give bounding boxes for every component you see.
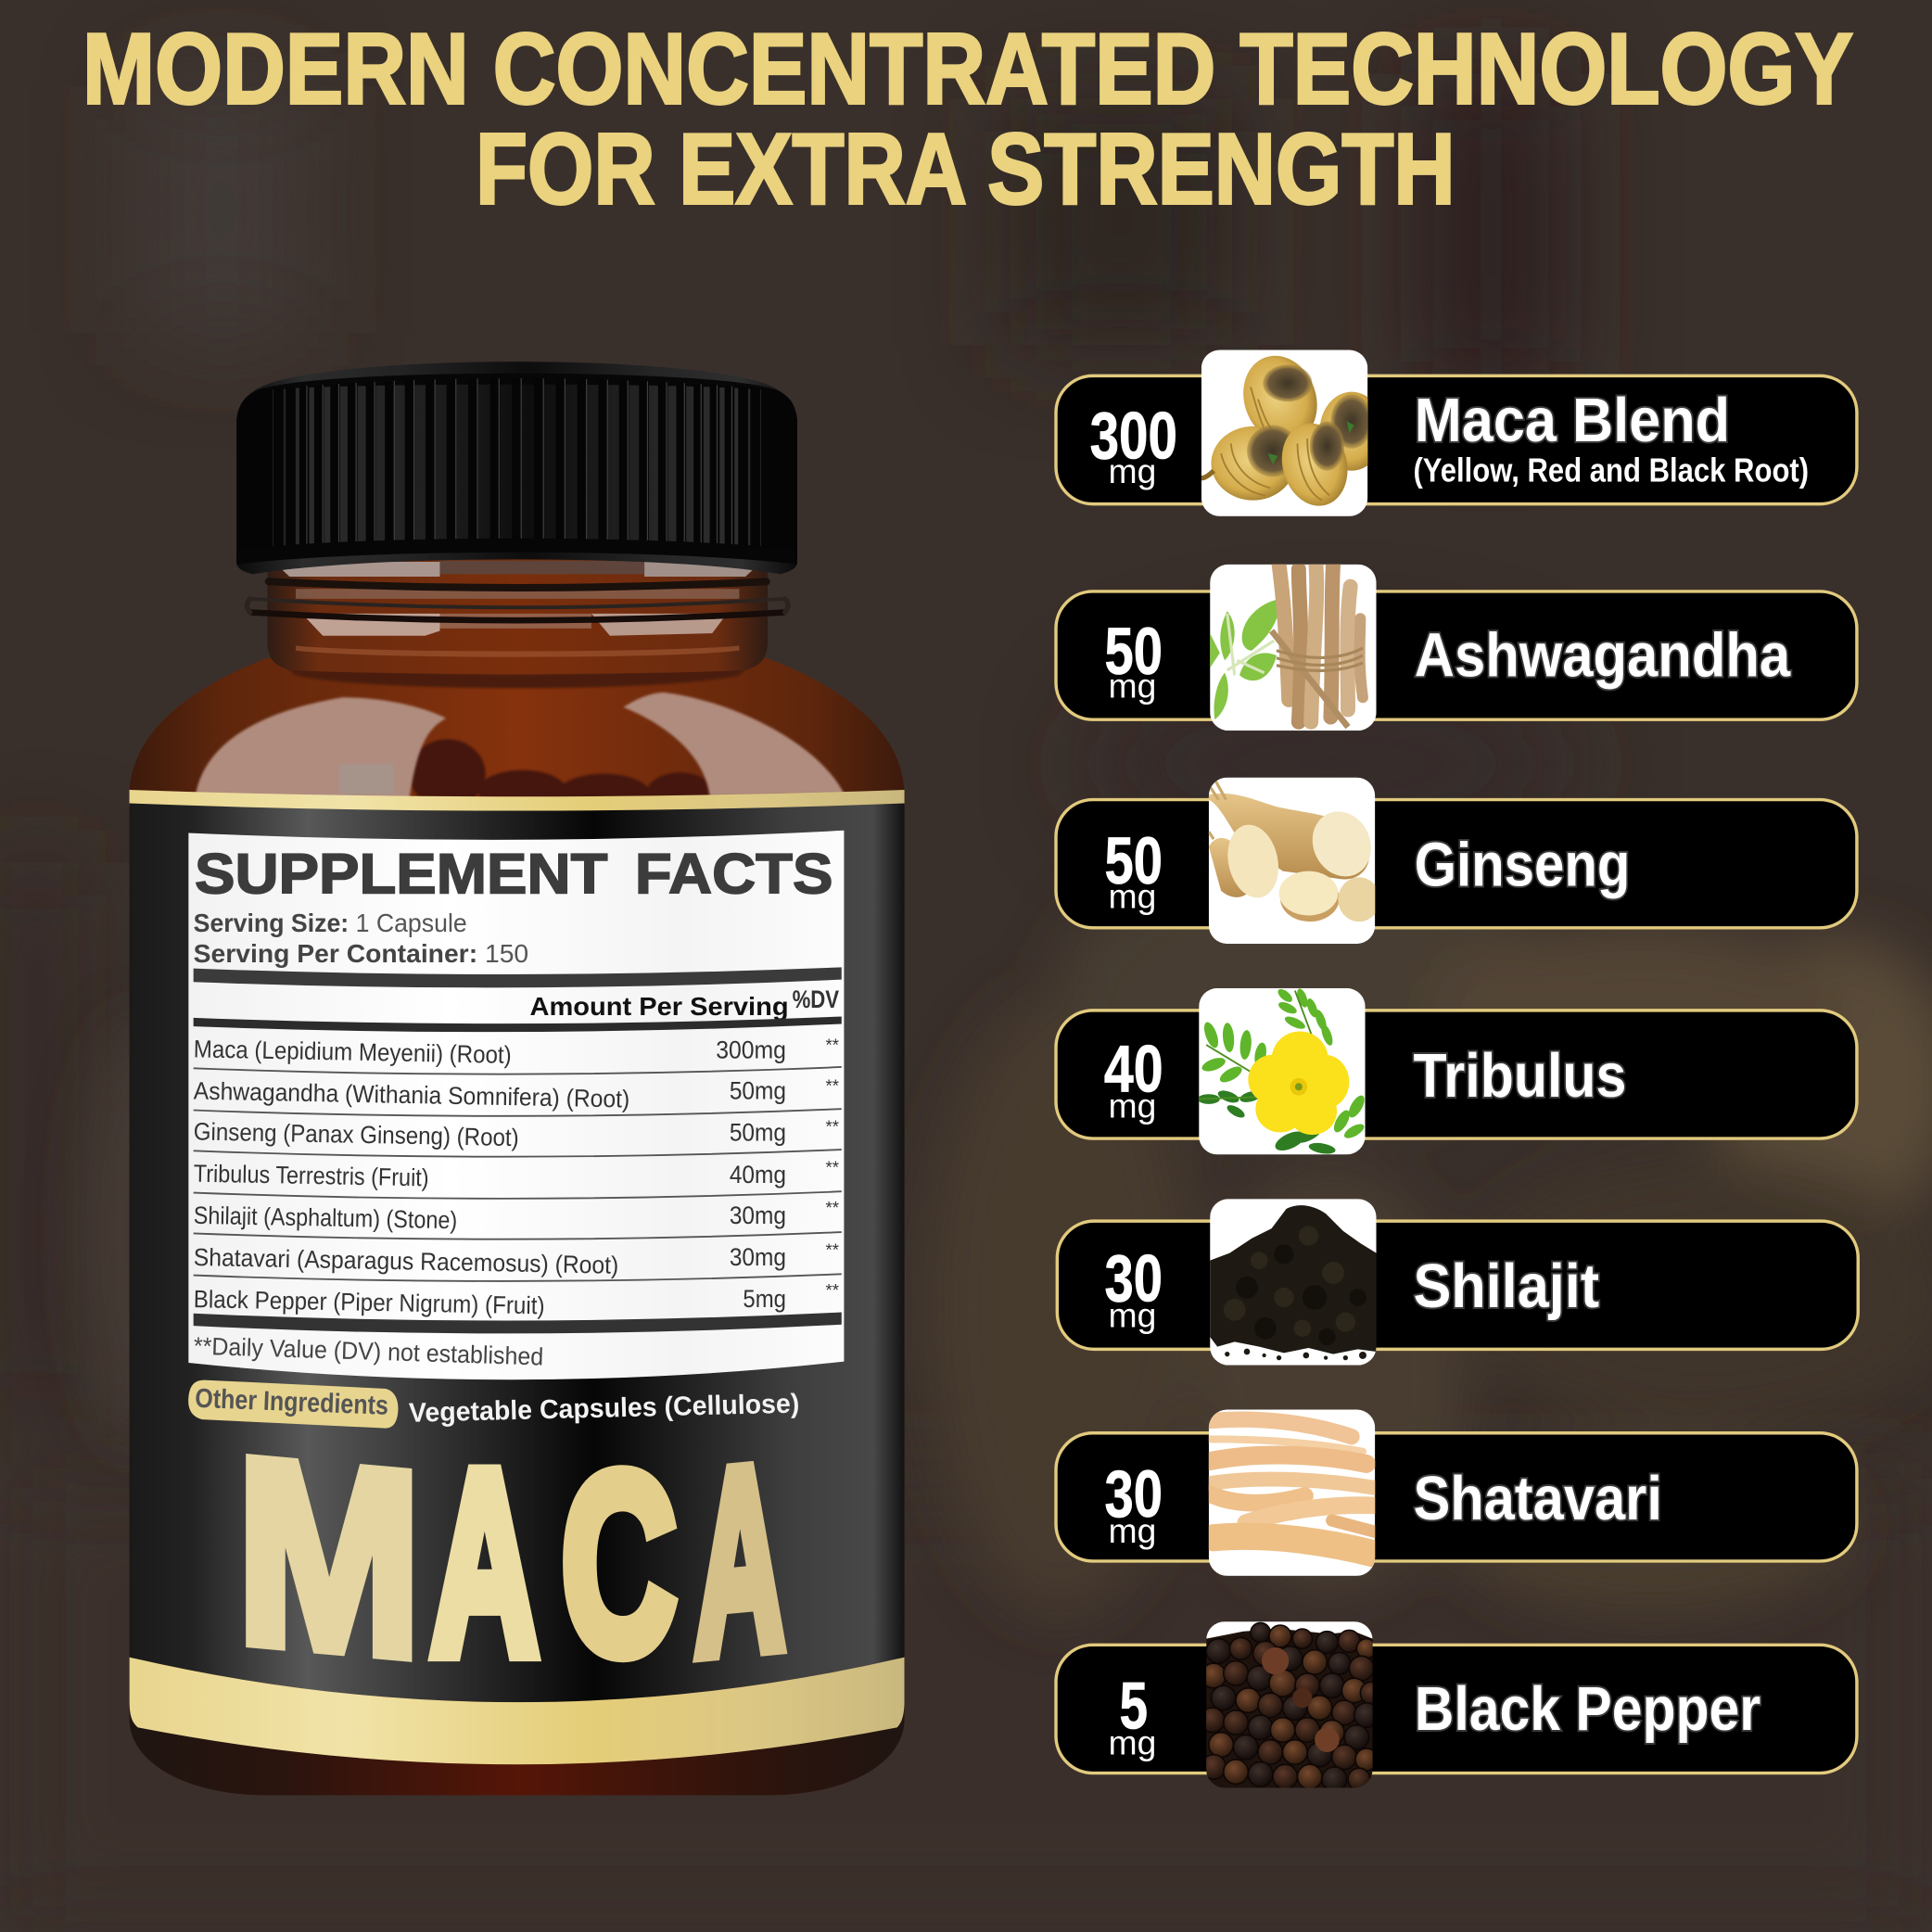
dosage: mg xyxy=(1109,877,1156,916)
gold bottom label band xyxy=(130,1658,905,1764)
neck lip highlights xyxy=(296,645,739,657)
pill xyxy=(1056,1645,1857,1773)
dosage xyxy=(1104,1033,1163,1125)
name: Ashwagandha xyxy=(1415,622,1791,691)
dosage: 40 xyxy=(1104,1033,1163,1107)
row: Tribulus xyxy=(1056,986,1857,1155)
title: FOR EXTRA STRENGTH xyxy=(476,112,1455,225)
MACA wordmark: C xyxy=(562,1423,676,1706)
ingredient rows: ** xyxy=(825,1116,839,1136)
photo: ashwagandha roots and leaves xyxy=(1210,565,1377,731)
dosage xyxy=(1105,1242,1163,1334)
ingredient rows: ** xyxy=(825,1280,839,1300)
ingredient rows: ** xyxy=(825,1157,839,1176)
photo: maca roots xyxy=(1201,350,1368,516)
ingredient rows: Maca (Lepidium Meyenii) (Root) xyxy=(194,1035,512,1069)
dosage: mg xyxy=(1109,451,1156,490)
dosage: mg xyxy=(1109,1511,1156,1550)
table header: %DV xyxy=(793,985,839,1013)
supplement facts panel xyxy=(188,831,844,1379)
row: Ginseng xyxy=(1056,778,1857,944)
amber glass body xyxy=(130,658,905,1795)
table header: Amount Per Serving xyxy=(530,992,789,1021)
row: Ashwagandha xyxy=(1056,565,1857,731)
other ingredients: Other Ingredients xyxy=(195,1384,388,1421)
name: Black Pepper xyxy=(1415,1675,1760,1744)
neck rings xyxy=(247,581,788,620)
dosage xyxy=(1105,824,1163,916)
ingredient list xyxy=(1056,345,1858,1791)
other ingredients xyxy=(188,1380,800,1429)
ingredient rows: ** xyxy=(825,1239,839,1259)
row: Shatavari xyxy=(1056,1409,1857,1576)
photo: shilajit powder pile xyxy=(1210,1199,1377,1366)
serving info xyxy=(194,909,528,968)
dosage: 5 xyxy=(1119,1670,1148,1744)
product bottle xyxy=(123,362,912,1799)
dosage xyxy=(1090,399,1177,490)
ingredient rows: ** xyxy=(825,1036,839,1055)
serving info: Serving Per Container: 150 xyxy=(194,939,528,968)
ingredient rows: 5mg xyxy=(743,1285,786,1313)
dosage xyxy=(1105,615,1163,705)
photo: shatavari roots xyxy=(1209,1409,1379,1576)
neck highlights xyxy=(273,561,761,636)
dosage: mg xyxy=(1109,1086,1156,1125)
row: Shilajit xyxy=(1057,1199,1858,1366)
ingredient rows: ** xyxy=(825,1198,839,1217)
dosage: 30 xyxy=(1105,1242,1163,1316)
name: Shatavari xyxy=(1413,1465,1662,1533)
capsules seen through the glass xyxy=(409,739,715,817)
table header xyxy=(530,985,839,1021)
ingredient rows: Ginseng (Panax Ginseng) (Root) xyxy=(194,1117,519,1151)
pill xyxy=(1056,375,1857,504)
panel background xyxy=(188,831,844,1379)
photo: tribulus flower xyxy=(1198,986,1367,1155)
ingredient rows: 40mg xyxy=(730,1161,786,1188)
MACA wordmark: A xyxy=(695,1412,784,1710)
dosage: mg xyxy=(1109,1723,1156,1762)
ingredient rows: Shatavari (Asparagus Racemosus) (Root) xyxy=(194,1243,619,1279)
dosage xyxy=(1109,1670,1156,1762)
bottom divider xyxy=(194,1312,842,1333)
black label xyxy=(130,804,905,1702)
title xyxy=(83,13,1853,225)
ingredient rows xyxy=(194,1035,842,1319)
ingredient rows: Black Pepper (Piper Nigrum) (Fruit) xyxy=(194,1285,545,1319)
supplement facts heading: SUPPLEMENT FACTS xyxy=(195,843,833,906)
screw cap xyxy=(236,362,797,574)
gold top label stripe xyxy=(130,790,905,813)
MACA wordmark: A xyxy=(431,1417,538,1709)
thick divider xyxy=(194,967,842,987)
dosage: mg xyxy=(1109,666,1156,705)
glass base xyxy=(123,1700,912,1799)
name: (Yellow, Red and Black Root) xyxy=(1413,452,1809,489)
ingredient rows: 30mg xyxy=(730,1201,786,1229)
ingredient rows: Shilajit (Asphaltum) (Stone) xyxy=(194,1201,457,1234)
dosage: 50 xyxy=(1105,824,1163,898)
dosage: 50 xyxy=(1105,615,1163,689)
dosage xyxy=(1105,1457,1163,1550)
ingredient rows: 50mg xyxy=(730,1077,786,1105)
ingredient rows: 50mg xyxy=(730,1119,786,1147)
header divider xyxy=(194,1016,842,1032)
cap ridges xyxy=(241,370,794,557)
ingredient rows: Ashwagandha (Withania Somnifera) (Root) xyxy=(194,1077,630,1113)
dosage: 30 xyxy=(1105,1457,1163,1532)
MACA wordmark: M xyxy=(236,1402,421,1712)
shadow under neck xyxy=(273,655,761,688)
ingredient rows: 30mg xyxy=(730,1243,786,1271)
name: Shilajit xyxy=(1413,1252,1599,1321)
name: Tribulus xyxy=(1413,1042,1626,1111)
name: Ginseng xyxy=(1415,832,1630,900)
name xyxy=(1413,387,1809,489)
pill xyxy=(1056,1433,1857,1561)
name: Maca Blend xyxy=(1415,387,1730,455)
MACA wordmark xyxy=(236,1402,784,1712)
row: Maca Blend xyxy=(1056,345,1857,516)
serving info: Serving Size: 1 Capsule xyxy=(194,909,467,937)
dosage: mg xyxy=(1109,1295,1156,1334)
pill xyxy=(1056,1010,1857,1138)
ingredient rows: 300mg xyxy=(716,1036,786,1064)
dosage: 300 xyxy=(1090,399,1177,473)
ingredient rows: Tribulus Terrestris (Fruit) xyxy=(194,1160,429,1191)
daily value footnote: **Daily Value (DV) not established xyxy=(193,1332,544,1371)
pill xyxy=(1057,1221,1858,1349)
ingredient rows: ** xyxy=(825,1076,839,1096)
row: Black Pepper xyxy=(1056,1621,1857,1791)
capsule description: Vegetable Capsules (Cellulose) xyxy=(409,1389,800,1429)
bottle neck xyxy=(267,554,768,674)
glass highlights xyxy=(196,693,844,801)
pill xyxy=(1056,591,1857,719)
photo: ginseng slices xyxy=(1209,778,1381,944)
pill xyxy=(1056,800,1857,928)
other ingredients pill xyxy=(188,1380,398,1429)
photo: black peppercorns xyxy=(1201,1621,1382,1791)
